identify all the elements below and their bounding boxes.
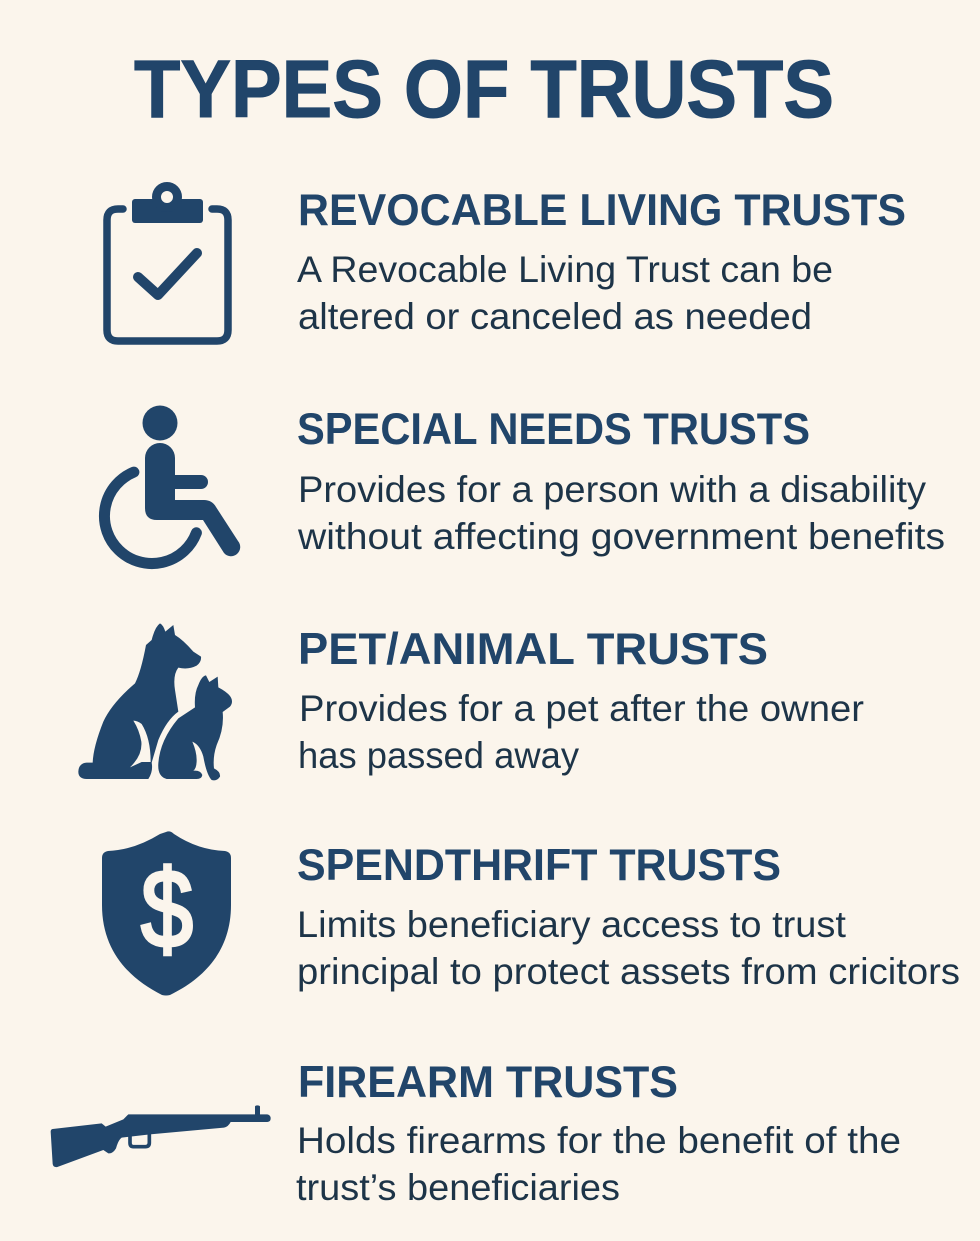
description: Holds firearms for the benefit of the xyxy=(297,1119,901,1161)
title: TYPES OF TRUSTS xyxy=(134,44,834,135)
description: altered or canceled as needed xyxy=(298,295,812,337)
heading: PET/ANIMAL TRUSTS xyxy=(298,625,768,674)
icon: wheelchair user xyxy=(104,406,240,564)
description: Provides for a person with a disability xyxy=(298,468,926,510)
description xyxy=(297,248,833,337)
description: without affecting government benefits xyxy=(297,515,945,557)
description xyxy=(297,468,945,557)
description: Provides for a pet after the owner xyxy=(299,687,864,729)
panel: pet/animal trusts xyxy=(78,623,864,780)
icon: shield with dollar sign: $ xyxy=(141,848,193,971)
heading: SPECIAL NEEDS TRUSTS xyxy=(297,405,810,454)
heading: REVOCABLE LIVING TRUSTS xyxy=(298,186,906,235)
description: has passed away xyxy=(298,734,579,776)
icon: shield with dollar sign xyxy=(102,831,231,996)
description xyxy=(298,687,864,776)
description: Limits beneficiary access to trust xyxy=(297,903,847,945)
icon: dog and cat silhouette xyxy=(78,623,232,780)
heading: FIREARM TRUSTS xyxy=(298,1058,678,1107)
icon: rifle silhouette xyxy=(51,1105,271,1167)
panel: spendthrift trusts xyxy=(102,831,960,996)
panel: revocable living trusts xyxy=(107,186,906,341)
description: A Revocable Living Trust can be xyxy=(297,248,833,290)
panel: special needs trusts xyxy=(104,405,945,564)
panel: firearm trusts xyxy=(51,1058,901,1208)
description xyxy=(297,903,960,992)
icon: clipboard with check mark xyxy=(107,186,228,341)
description: trust’s beneficiaries xyxy=(296,1166,620,1208)
description: principal to protect assets from cricitors xyxy=(297,950,960,992)
description xyxy=(296,1119,901,1208)
heading: SPENDTHRIFT TRUSTS xyxy=(297,841,781,890)
